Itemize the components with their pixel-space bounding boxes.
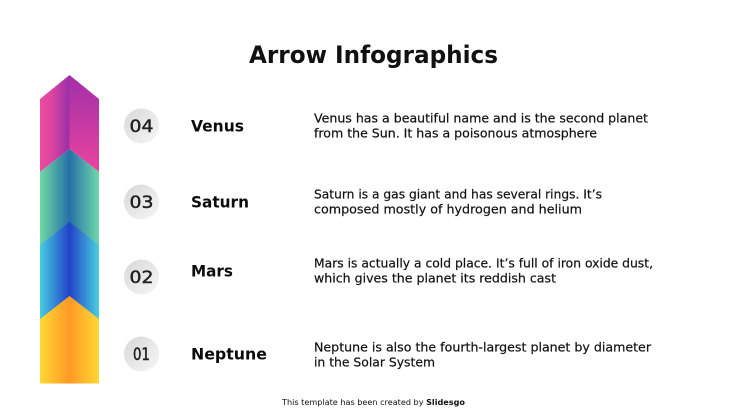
heading: Neptune: Neptune: [191, 344, 267, 364]
number badge 04: 04: [130, 117, 154, 137]
arrow segment: yellow: [40, 296, 99, 384]
heading: Venus: Venus: [191, 116, 244, 136]
heading: Mars: Mars: [191, 262, 233, 280]
number badge 02: 02: [130, 268, 154, 288]
description: Neptune: Neptune is also the fourth-largest planet by diameter: [314, 340, 651, 354]
description: Venus: Venus has a beautiful name and is the second planet: [314, 112, 648, 126]
description: Neptune: in the Solar System: [314, 356, 435, 370]
description: Saturn: Saturn is a gas giant and has several rings. It’s: [314, 188, 602, 202]
description: Venus: from the Sun. It has a poisonous atmosphere: [314, 126, 597, 140]
description: Venus: [314, 112, 648, 140]
description: Mars: Mars is actually a cold place. It’s full of iron oxide dust,: [314, 256, 653, 270]
number badge 02: [124, 260, 159, 294]
arrow segment: green: [40, 149, 99, 246]
heading: Saturn: Saturn: [191, 192, 249, 212]
arrow: stacked chevron column: [40, 75, 99, 384]
description: Mars: which gives the planet its reddish cast: [314, 272, 556, 286]
number badge 03: [124, 184, 159, 220]
description: Saturn: composed mostly of hydrogen and helium: [314, 202, 582, 216]
number badge 03: 03: [130, 193, 154, 213]
number badge 04: [124, 108, 159, 144]
number badge 01: [124, 336, 159, 372]
footer credit: This template has been created by Slidesgo: [281, 398, 465, 407]
title: Arrow Infographics: [249, 41, 498, 69]
arrow segment: pink: [40, 75, 99, 172]
row: Neptune: [124, 336, 651, 372]
row: Venus: [124, 108, 648, 144]
row: Saturn: [124, 184, 602, 220]
description: Saturn: [314, 188, 602, 216]
number badge 01: 01: [133, 345, 150, 365]
description: Neptune: [314, 340, 651, 370]
row: Mars: [124, 256, 653, 294]
description: Mars: [314, 256, 653, 286]
arrow segment: blue: [40, 222, 99, 320]
